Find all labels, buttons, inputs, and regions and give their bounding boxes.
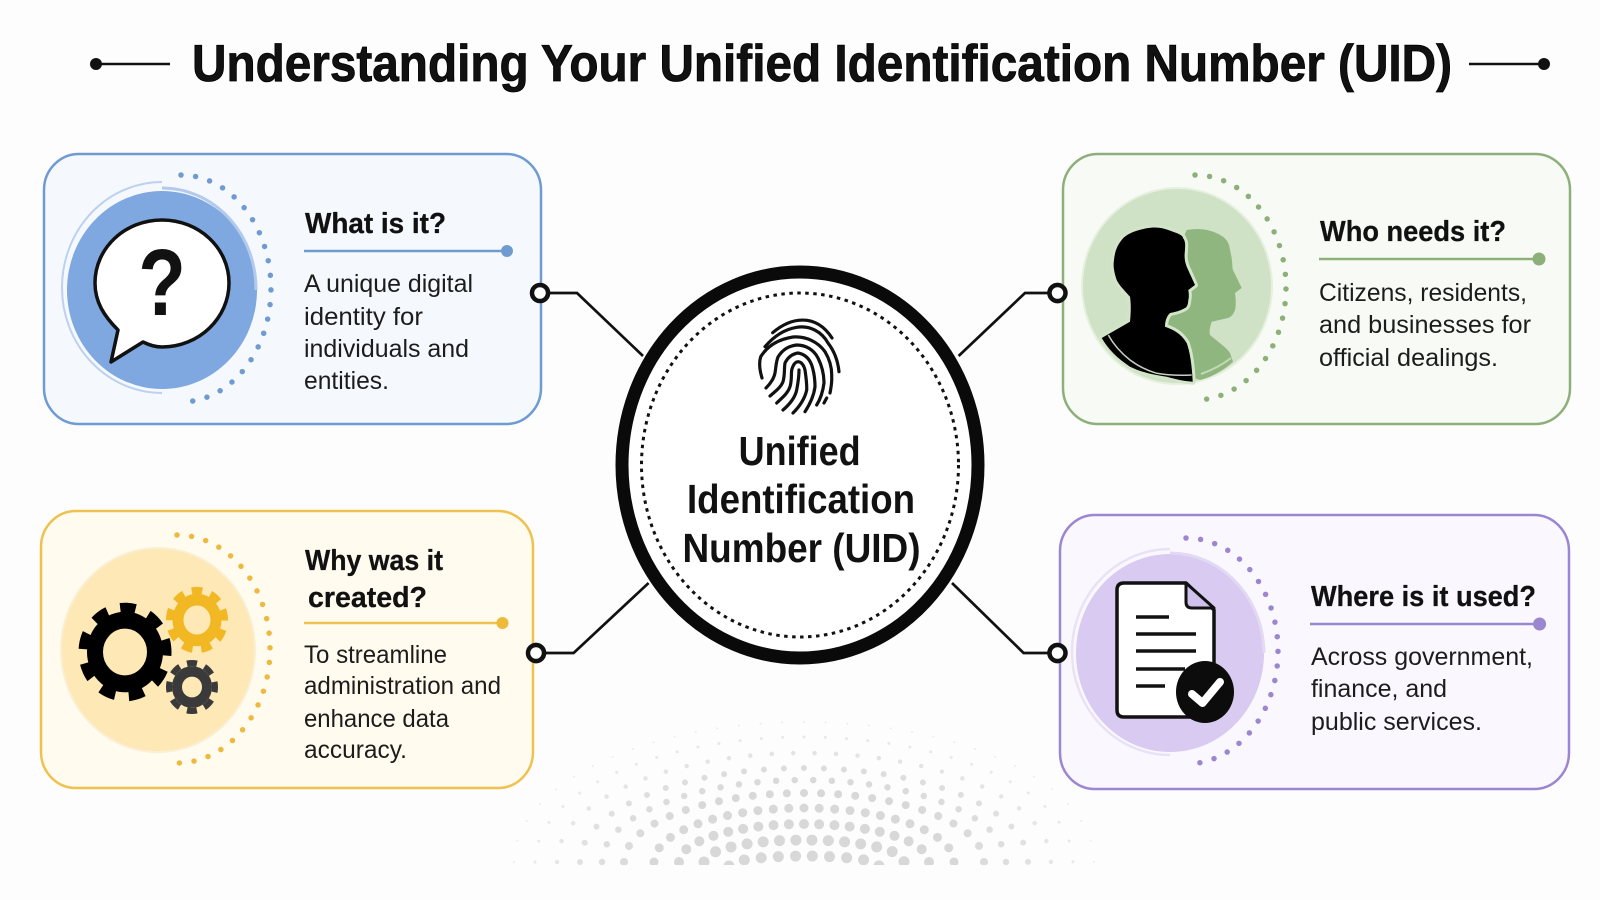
body text: official dealings. (1319, 344, 1498, 372)
connector: why was it created (528, 583, 649, 661)
connector node over card (1050, 285, 1066, 301)
body text: public services. (1311, 708, 1482, 736)
yellow gear (165, 586, 229, 654)
title ornament right (1469, 58, 1550, 70)
connector: who needs it (959, 285, 1066, 356)
body text: identity for (304, 303, 423, 331)
body text: administration and (304, 672, 501, 700)
panel: who needs it (1050, 154, 1570, 424)
icon: question speech bubble: ? (138, 230, 186, 336)
body text: enhance data (304, 705, 449, 733)
connector: where is it used (952, 583, 1066, 661)
heading rule (304, 617, 508, 629)
badge text: Unified (739, 428, 861, 474)
body text (304, 270, 473, 395)
heading: Where is it used? (1311, 581, 1536, 613)
panel: what is it (44, 154, 548, 424)
title text: Understanding Your Unified Identification Number (UID) (192, 35, 1452, 93)
title ornament left (90, 58, 170, 70)
heading (305, 545, 443, 614)
body text: and businesses for (1319, 311, 1531, 339)
heading rule (1319, 252, 1546, 266)
dotted inner ring (642, 293, 958, 637)
heading: created? (308, 582, 427, 614)
badge text: Identification (687, 476, 915, 522)
heading rule (1310, 618, 1546, 630)
icon: fingerprint (760, 320, 839, 413)
body text: To streamline (304, 641, 447, 669)
body text: accuracy. (304, 736, 407, 764)
heading: Why was it (305, 545, 443, 577)
connector: what is it (532, 285, 643, 356)
dark gear (165, 658, 219, 716)
icon: gears (61, 535, 270, 763)
body text: individuals and (304, 335, 469, 363)
central badge (622, 272, 978, 658)
heading: Who needs it? (1320, 216, 1506, 248)
badge text (682, 428, 920, 571)
body text: A unique digital (304, 270, 473, 298)
body text (1311, 643, 1533, 736)
body text: Across government, (1311, 643, 1533, 671)
card background (1060, 515, 1569, 789)
body text: finance, and (1311, 675, 1447, 703)
background dot dome (514, 722, 1094, 866)
title (90, 35, 1550, 93)
badge text: Number (UID) (682, 525, 920, 571)
card background (41, 511, 533, 788)
body text (1319, 279, 1531, 372)
panel: why was it created (41, 511, 544, 788)
card background (44, 154, 541, 424)
icon: two silhouettes (1082, 175, 1286, 400)
heading: What is it? (305, 208, 446, 240)
card background (1063, 154, 1570, 424)
connector node over card (528, 645, 544, 661)
body text (304, 641, 501, 764)
connector node over card (532, 285, 548, 301)
body text: entities. (304, 367, 389, 395)
body text: Citizens, residents, (1319, 279, 1527, 307)
heading rule (304, 245, 513, 257)
connector node over card (1050, 645, 1066, 661)
outer ring (622, 272, 978, 658)
panel: where is it used (1050, 515, 1569, 789)
icon: document with check (1072, 538, 1278, 764)
icon: question speech bubble (62, 175, 271, 402)
black gear (78, 603, 172, 701)
